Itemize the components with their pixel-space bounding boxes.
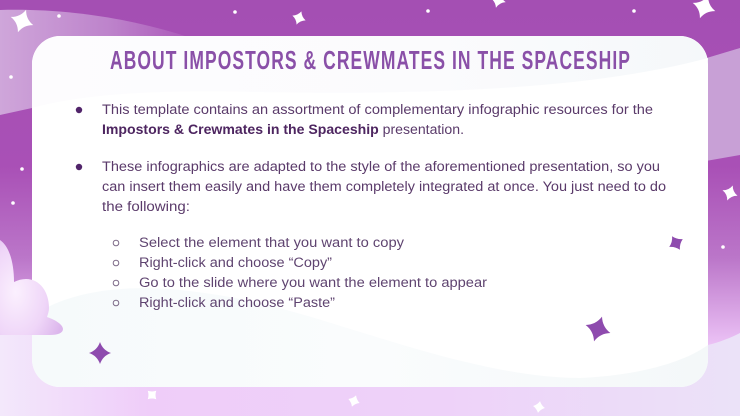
text block: first bullet (76, 102, 653, 137)
text block: second bullet: These infographics are adapted to the style of the aforementioned presentation, so you (102, 159, 660, 174)
text block: first bullet: Impostors & Crewmates in the Spaceship presentation. (102, 122, 464, 137)
text block: second bullet: can insert them easily and have them completely integrated at once. You just need to do (102, 179, 666, 194)
text block: second bullet: the following: (102, 199, 190, 214)
text block: first bullet: This template contains an assortment of complementary infographic resources for the (102, 102, 653, 117)
stars: purple (89, 236, 683, 364)
list: steps: Go to the slide where you want the element to appear (139, 275, 488, 290)
list: steps: Select the element that you want to copy (139, 235, 404, 250)
icon: cloud (0, 240, 63, 335)
text block: second bullet (76, 159, 666, 214)
list: steps: Right-click and choose “Copy” (139, 255, 332, 270)
list: steps: Right-click and choose “Paste” (139, 295, 335, 310)
list: steps (113, 235, 488, 310)
panel: content card (32, 36, 708, 387)
